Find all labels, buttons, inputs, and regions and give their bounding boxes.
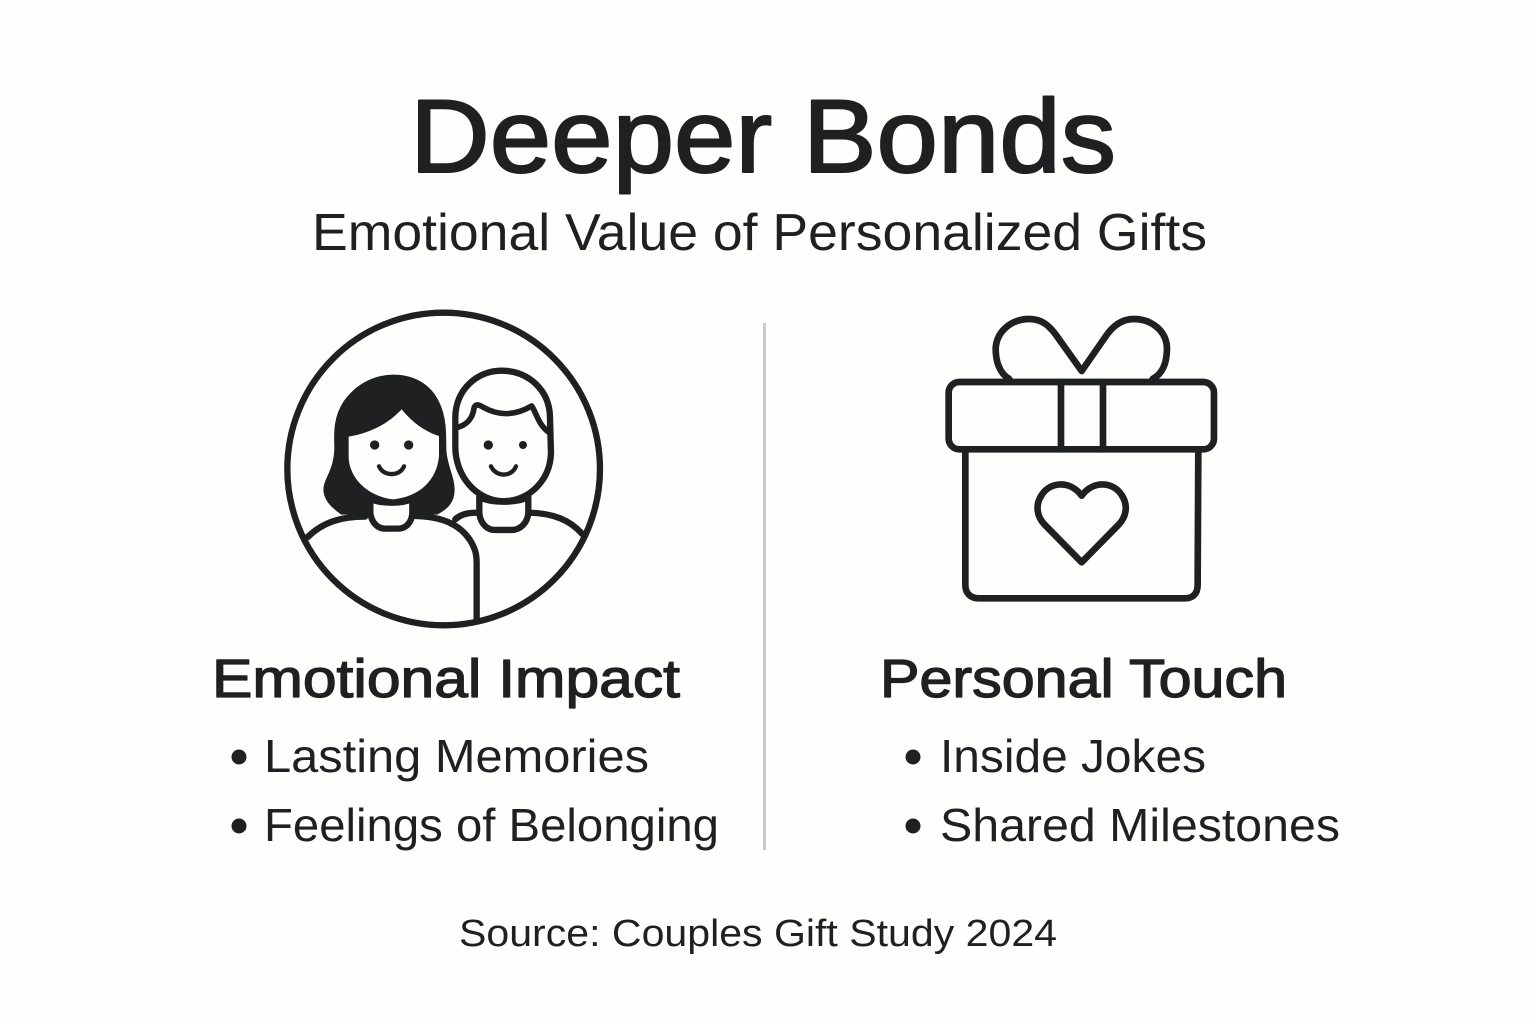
woman shoulders	[307, 516, 477, 619]
subtitle: Emotional Value of Personalized Gifts	[312, 204, 1207, 262]
man eyes	[484, 440, 527, 450]
bullet: feelings of belonging: Feelings of Belonging	[264, 799, 719, 851]
ribbon	[1061, 382, 1103, 449]
circle outline	[287, 313, 600, 625]
woman neck	[370, 499, 412, 529]
box body	[965, 452, 1198, 598]
bullet: lasting memories: Lasting Memories	[264, 730, 649, 782]
panel: emotional impact	[212, 649, 719, 851]
icon: couple in circle	[287, 313, 600, 625]
source note: Source: Couples Gift Study 2024	[459, 913, 1057, 955]
man hair	[457, 405, 549, 433]
woman eyes	[370, 440, 413, 450]
box lid	[949, 382, 1214, 449]
man smile	[491, 466, 516, 475]
woman hair	[325, 376, 453, 513]
heart	[1038, 484, 1126, 562]
bow	[996, 319, 1167, 379]
icon: gift box with heart	[949, 319, 1214, 598]
man shoulders	[455, 513, 582, 534]
vertical divider	[763, 323, 766, 850]
heading: emotional impact: Emotional Impact	[212, 649, 680, 709]
bullet: shared milestones: Shared Milestones	[940, 799, 1340, 851]
bullet: inside jokes: Inside Jokes	[940, 730, 1206, 782]
man head	[455, 371, 551, 501]
woman smile	[379, 466, 404, 474]
woman face	[349, 409, 439, 499]
heading: personal touch: Personal Touch	[880, 649, 1287, 709]
man neck	[479, 497, 528, 530]
panel: personal touch	[880, 649, 1340, 851]
title: Deeper Bonds	[410, 79, 1116, 195]
